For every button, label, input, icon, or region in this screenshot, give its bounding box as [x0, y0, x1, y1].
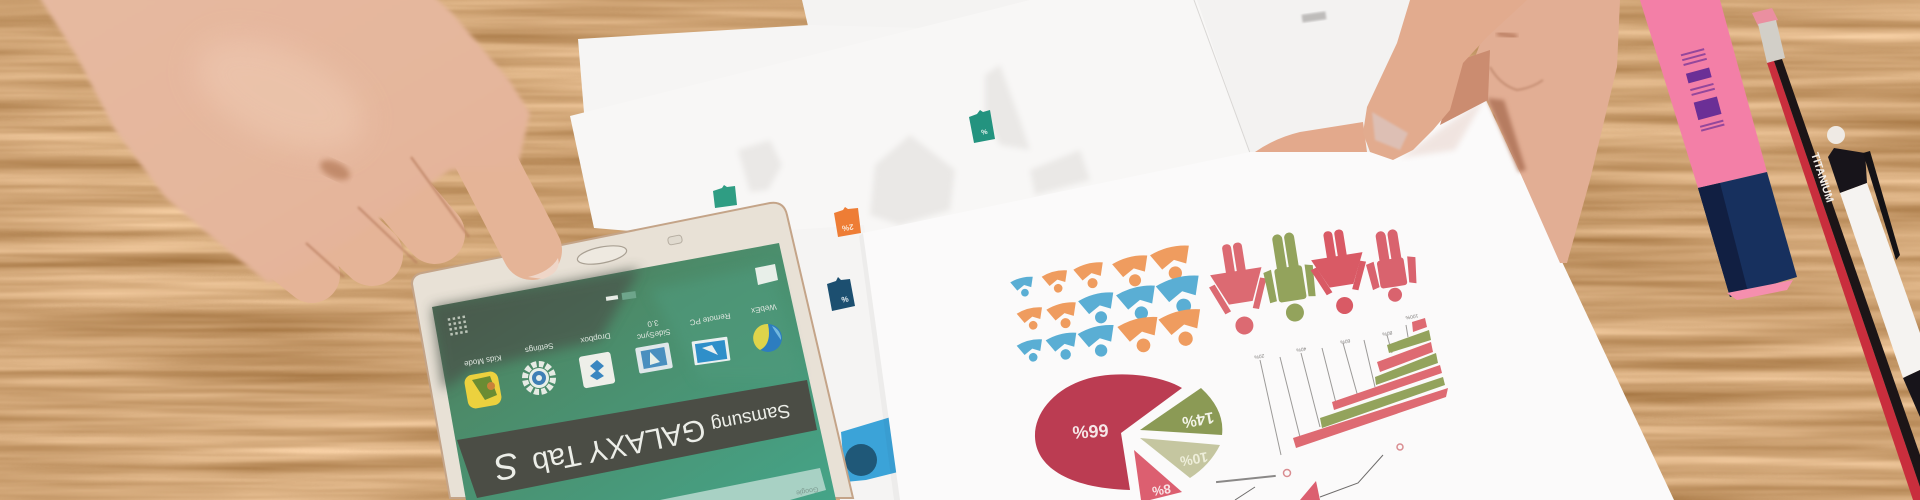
- finger under thumb: [1255, 122, 1367, 152]
- small caption on folded sheet: [1302, 11, 1326, 23]
- knuckle shadow: [317, 156, 353, 184]
- web between thumb and palm: [1440, 50, 1490, 125]
- icon: settings gear: [525, 364, 553, 392]
- blue icon tile: [841, 417, 898, 482]
- search bar: Google: [795, 485, 819, 496]
- map tag: navy: %: [841, 294, 849, 304]
- slice 14%: 14%: [1181, 408, 1215, 430]
- map blobs: [738, 65, 1090, 225]
- back of hand: [38, 0, 530, 283]
- paper: front infographic sheet: [859, 98, 1674, 500]
- slice 14%: [1140, 388, 1222, 435]
- person icon grid: [1010, 244, 1206, 364]
- bar chart: 100%: [1405, 312, 1419, 320]
- palm fold: [1490, 67, 1543, 90]
- pencil: TITANIUM: [1808, 151, 1836, 204]
- fold line: [1194, 0, 1250, 153]
- palm shadow along paper: [1487, 98, 1526, 172]
- app labels: Remote PC: [689, 311, 731, 327]
- pen: [1827, 126, 1920, 417]
- app labels: 3.0: [646, 318, 659, 329]
- palm: [1470, 0, 1620, 263]
- map tag: navy: [827, 277, 855, 311]
- app labels: Settings: [524, 341, 554, 355]
- home button: [576, 242, 628, 268]
- icon: sidesync: [635, 342, 673, 374]
- map tag: green: [713, 185, 737, 208]
- paper: map sheet: [570, 0, 1250, 500]
- knuckle highlight: [179, 16, 381, 174]
- thumbnail: [1372, 112, 1408, 150]
- bar chart: [1253, 312, 1448, 455]
- map tag: teal: %: [980, 127, 988, 135]
- search bar: [660, 468, 826, 500]
- tablet body: [412, 203, 853, 498]
- slice 66%: [1035, 374, 1182, 490]
- paper: left back sheet: [578, 25, 1000, 125]
- app labels: SideSync: [636, 327, 671, 342]
- slice 66%: 66%: [1072, 420, 1109, 442]
- tablet: [412, 203, 853, 500]
- line chart fragment: [1216, 444, 1403, 500]
- large figures: [1203, 226, 1422, 339]
- finger creases: [306, 157, 469, 277]
- figure: rose: [1361, 226, 1422, 305]
- figure: green: [1258, 230, 1321, 325]
- map tag: orange: 2%: [841, 222, 854, 233]
- map tag: teal: [969, 110, 995, 143]
- fingers: [262, 140, 532, 275]
- banner: GALAXY Tab: [529, 412, 708, 480]
- thumb: [1363, 0, 1527, 160]
- left hand: [38, 0, 559, 283]
- figure: red: [1305, 226, 1374, 318]
- highlighter body: [1640, 0, 1767, 188]
- screen: grid icon: [448, 316, 469, 334]
- app labels: Kids Mode: [463, 353, 502, 369]
- screen: chat icon: [755, 264, 778, 285]
- icon: webex: [753, 324, 782, 352]
- highlighter cap: [1698, 172, 1797, 297]
- highlighter tip: [1727, 280, 1793, 300]
- banner: [457, 380, 817, 498]
- right hand: [1255, 0, 1620, 263]
- paper: right folded sheet: [1194, 0, 1412, 158]
- banner: Samsung: [709, 399, 792, 435]
- barcode: [1681, 48, 1725, 132]
- bar chart: 40%: [1295, 345, 1307, 353]
- banner: S: [491, 444, 523, 489]
- camera: [667, 235, 683, 245]
- slice 10%: [1140, 438, 1220, 478]
- pie chart: [1035, 374, 1222, 500]
- slice 8%: 8%: [1151, 481, 1172, 499]
- paper stack: [570, 0, 1674, 500]
- bar chart: 20%: [1253, 352, 1265, 360]
- icon: remote pc: [692, 337, 730, 365]
- app labels: [463, 302, 777, 369]
- slice 8%: [1134, 450, 1182, 500]
- icon: dropbox: [578, 351, 616, 389]
- screen: [432, 243, 836, 500]
- icon: kids mode: [463, 370, 503, 410]
- map tag: orange: [834, 207, 861, 237]
- slice 10%: 10%: [1178, 449, 1209, 470]
- pencil: [1752, 8, 1920, 500]
- app labels: WebEx: [750, 302, 777, 315]
- thumbnail: [528, 258, 559, 279]
- bar chart: 80%: [1381, 329, 1393, 337]
- highlighter: [1640, 0, 1797, 300]
- crease: [1497, 33, 1517, 37]
- screen: page dots: [606, 291, 636, 301]
- paper: top back sheet: [802, 0, 1200, 60]
- bar chart: 60%: [1339, 337, 1351, 345]
- figure: pink: [1203, 239, 1274, 339]
- app labels: Dropbox: [580, 331, 611, 345]
